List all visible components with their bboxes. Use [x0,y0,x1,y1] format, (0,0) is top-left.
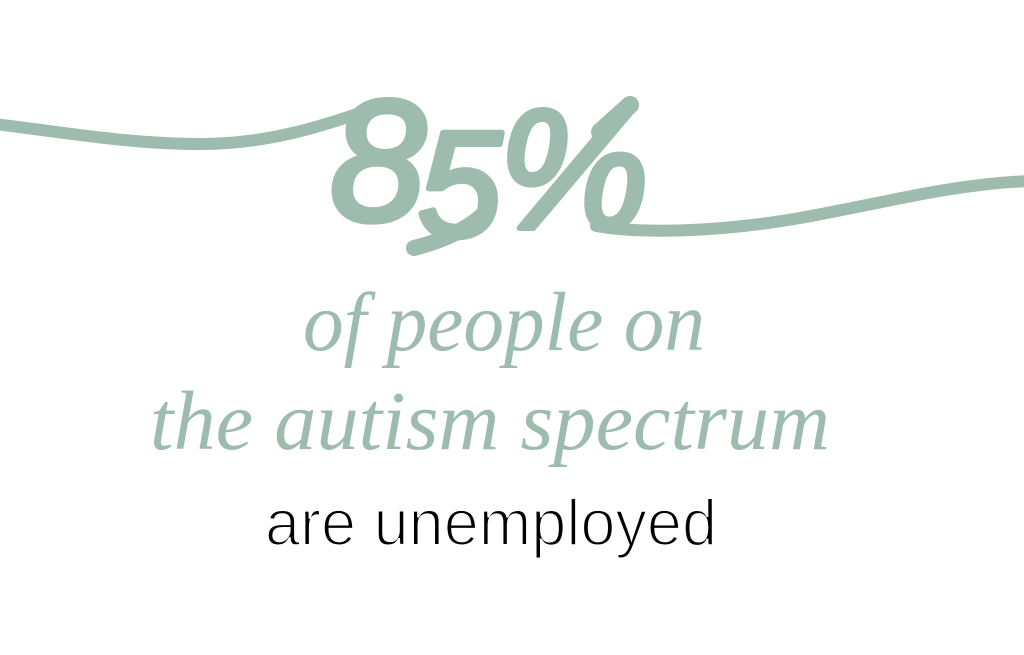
big statistic: 85%: 5 [418,100,502,268]
swoosh line: right [596,181,1024,231]
big statistic: 85%: % [498,75,649,265]
text: are unemployed: are unemployed [265,486,717,559]
script text: the autism spectrum: the autism spectrum [150,375,830,468]
script text: of people on: of people on [303,276,705,369]
swoosh flourishes on the numerals [414,105,630,248]
swoosh line: left [0,104,385,144]
big statistic: 85%: 8 [330,65,426,257]
big statistic: 85% [330,65,649,268]
